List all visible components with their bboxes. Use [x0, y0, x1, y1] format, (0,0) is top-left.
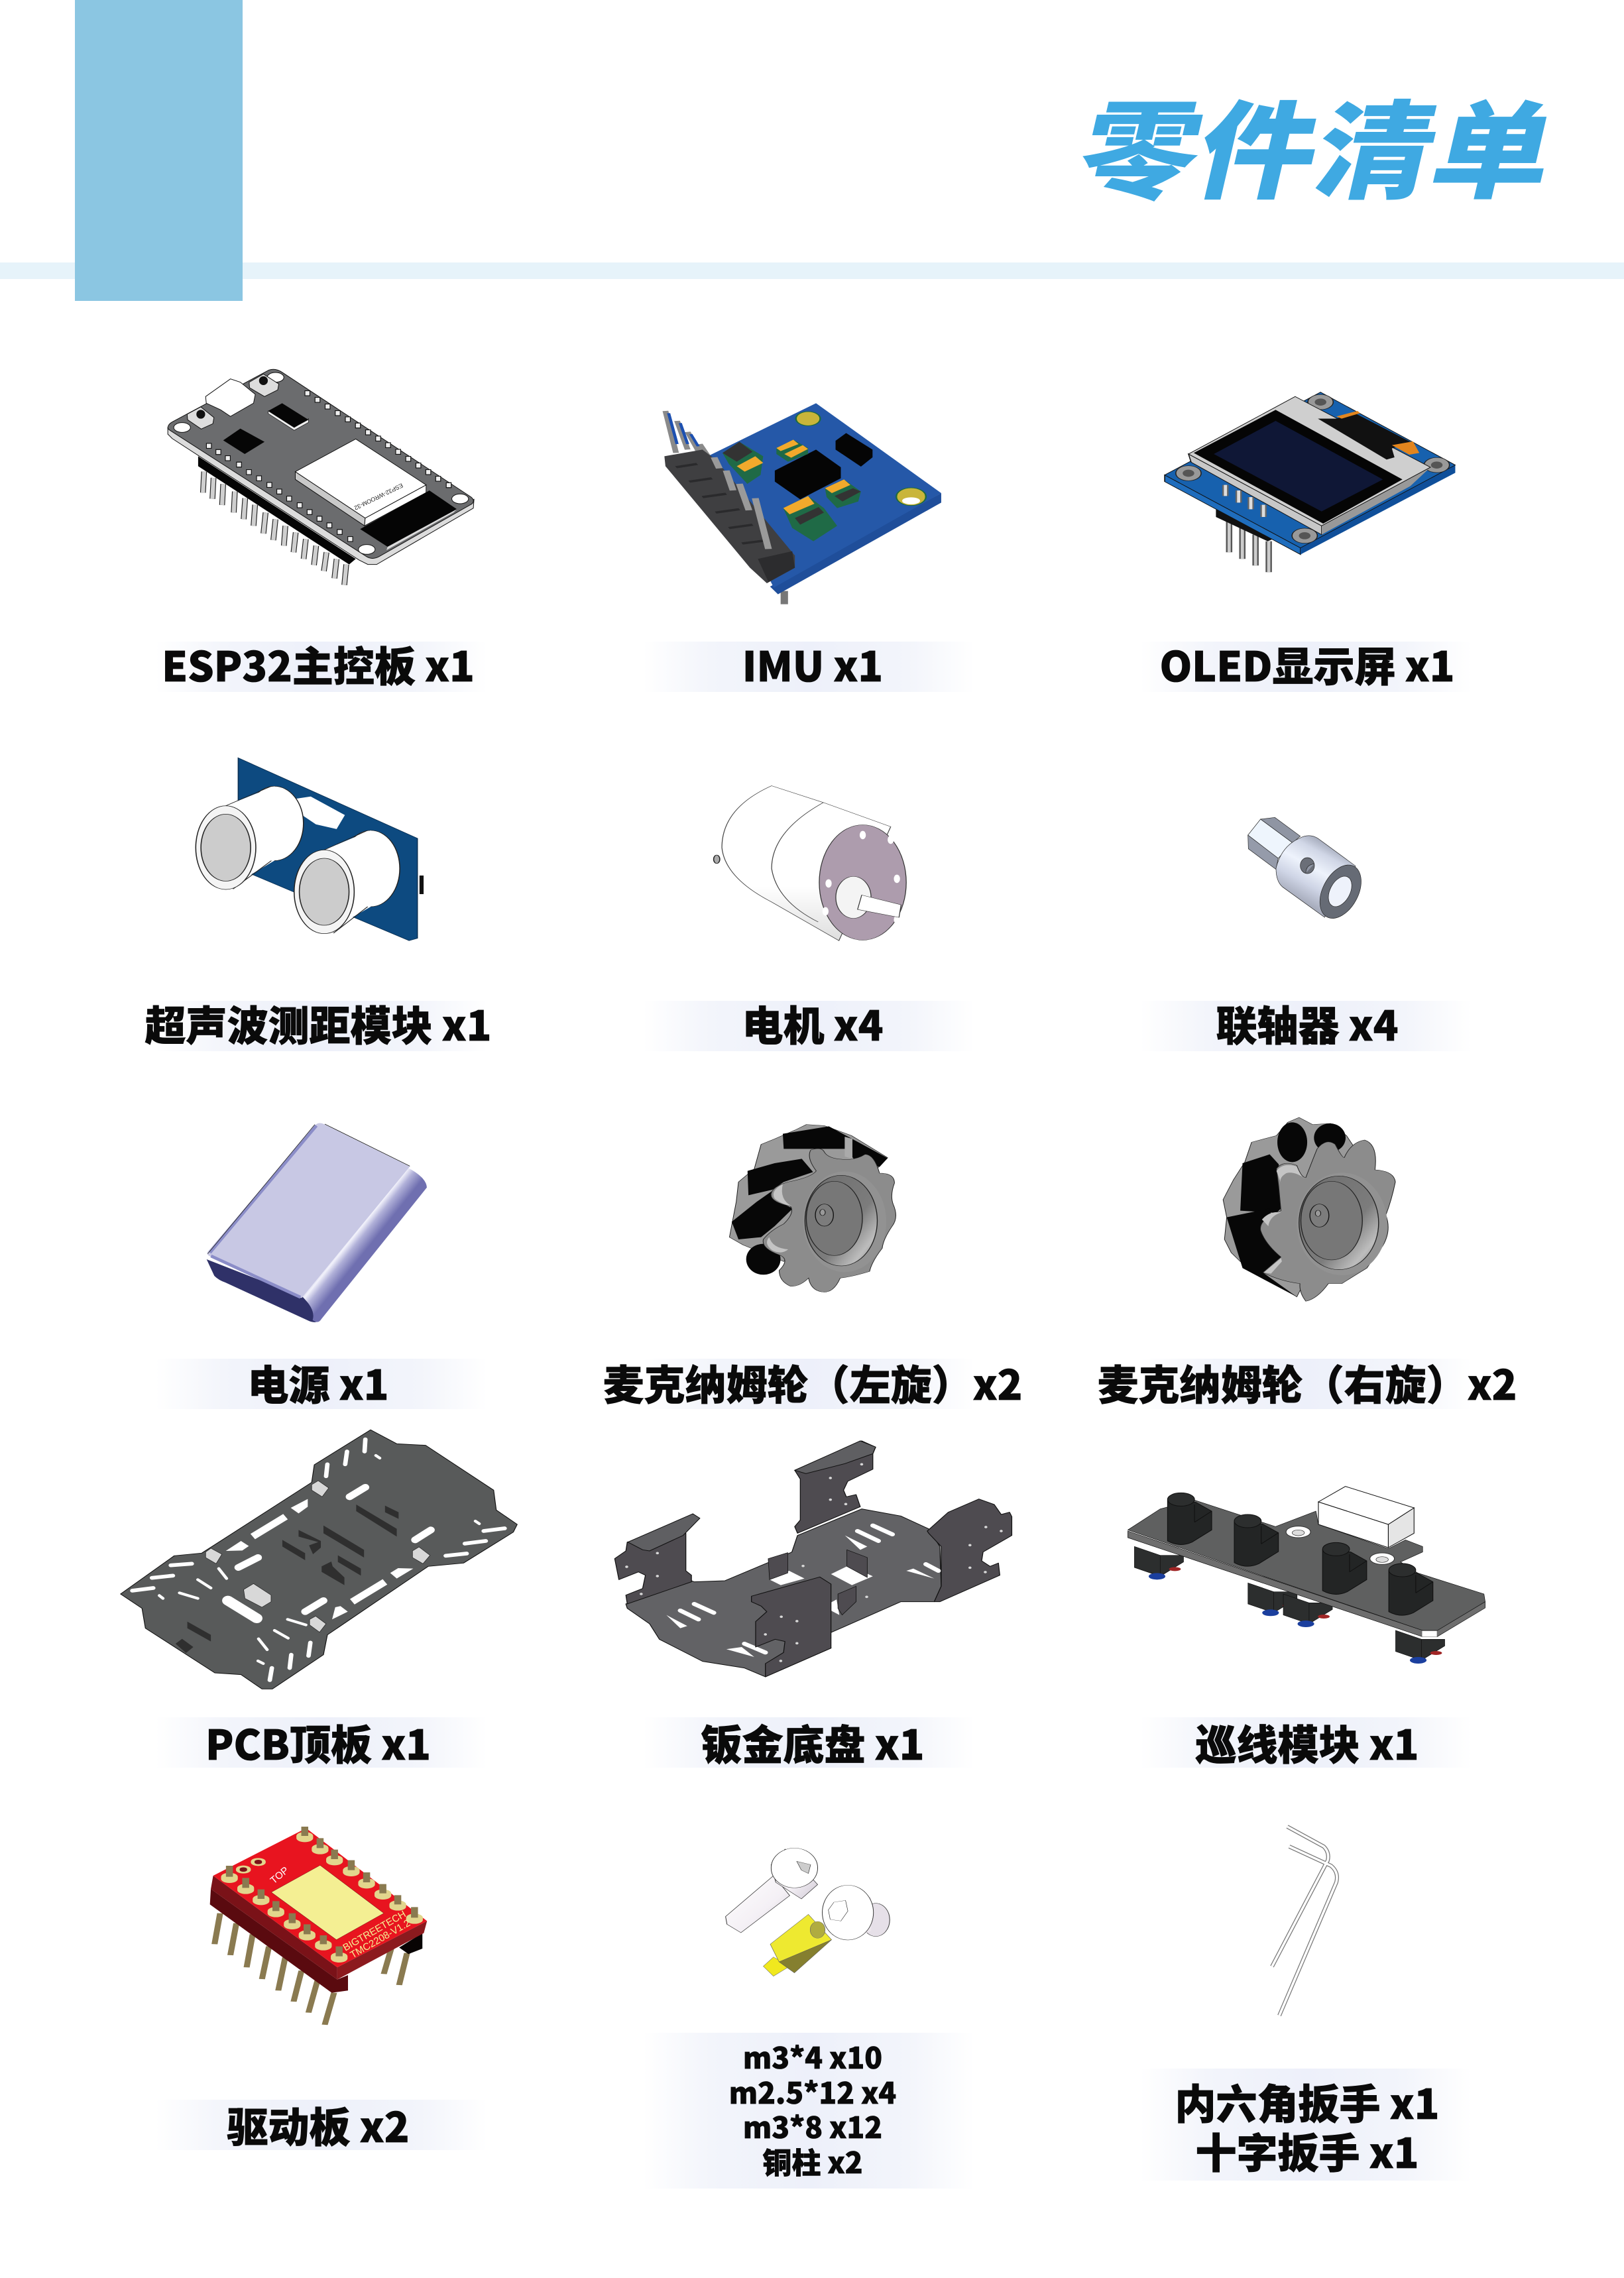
label band: IMU — [643, 642, 974, 692]
icon: screws and copper standoff — [726, 1848, 890, 1976]
icon: IMU board — [664, 403, 941, 604]
label: motor: 电机 x4 — [742, 993, 884, 1053]
label: wheel left: 麦克纳姆轮（左旋）x2 — [603, 1352, 1022, 1412]
label band: wheel left — [643, 1359, 974, 1409]
header accent block — [75, 0, 243, 301]
label band: driver — [156, 2100, 487, 2150]
label band: motor — [643, 1001, 974, 1051]
label: screws list: m3*4 x10 — [743, 2035, 882, 2077]
label band: screws — [643, 2033, 974, 2189]
label: ESP32: ESP32主控板 x1 — [162, 634, 475, 693]
module marking: ESP32-WROOM-32 — [353, 482, 404, 511]
label band: wrenches — [1140, 2069, 1472, 2181]
icon: sheet metal chassis — [614, 1441, 1012, 1677]
icon: ultrasonic sensor — [196, 758, 424, 940]
label: line module: 巡线模块 x1 — [1195, 1712, 1419, 1772]
header band — [0, 262, 1624, 279]
driver board markings: TOP — [268, 1864, 291, 1886]
label band: coupler — [1140, 1001, 1472, 1051]
label: screws list: m2.5*12 x4 — [729, 2070, 896, 2112]
icon: motor driver board — [210, 1827, 427, 2025]
driver board markings — [268, 1864, 412, 1961]
icon: line tracking module — [1128, 1487, 1485, 1664]
icon: mecanum wheel left — [729, 1125, 896, 1292]
icon: mecanum wheel right — [1223, 1117, 1395, 1301]
label: wrenches — [1175, 2071, 1440, 2180]
label: OLED: OLED显示屏 x1 — [1159, 634, 1455, 693]
label: chassis: 钣金底盘 x1 — [701, 1712, 925, 1772]
icon: gear motor — [714, 786, 906, 940]
title: 零件清单 — [1067, 67, 1572, 221]
label band: PCB — [156, 1717, 487, 1768]
label: wrenches: 十字扳手 x1 — [1195, 2120, 1419, 2180]
label: screws list: m3*8 x12 — [743, 2104, 882, 2147]
label: wheel right: 麦克纳姆轮（右旋）x2 — [1098, 1352, 1517, 1412]
label: screws list — [729, 2035, 896, 2182]
icon: coupler — [1248, 817, 1369, 925]
label: wrenches: 内六角扳手 x1 — [1175, 2071, 1440, 2131]
label band: ultrasonic — [156, 1001, 487, 1051]
icon: battery — [207, 1123, 427, 1322]
icon: ESP32 board — [168, 369, 474, 585]
label: ultrasonic: 超声波测距模块 x1 — [145, 993, 492, 1053]
driver board markings: BIGTREETECH — [341, 1908, 408, 1953]
icon: hex wrenches — [1272, 1827, 1337, 2016]
label: battery: 电源 x1 — [247, 1352, 389, 1412]
icon: OLED display — [1165, 392, 1455, 572]
label band: chassis — [643, 1717, 974, 1768]
label: coupler: 联轴器 x4 — [1216, 993, 1399, 1053]
label band: ESP32 — [156, 642, 487, 692]
label band: battery — [156, 1359, 487, 1409]
label: screws list: 铜柱 x2 — [762, 2139, 863, 2182]
label band: wheel right — [1140, 1359, 1472, 1409]
label band: OLED — [1140, 642, 1472, 692]
label: IMU: IMU x1 — [742, 634, 883, 693]
label: PCB: PCB顶板 x1 — [205, 1712, 431, 1772]
label band: line module — [1140, 1717, 1472, 1768]
icon: PCB top plate — [121, 1430, 517, 1689]
label: driver: 驱动板 x2 — [227, 2094, 410, 2154]
driver board markings: TMC2208-V1.2 — [349, 1917, 412, 1961]
